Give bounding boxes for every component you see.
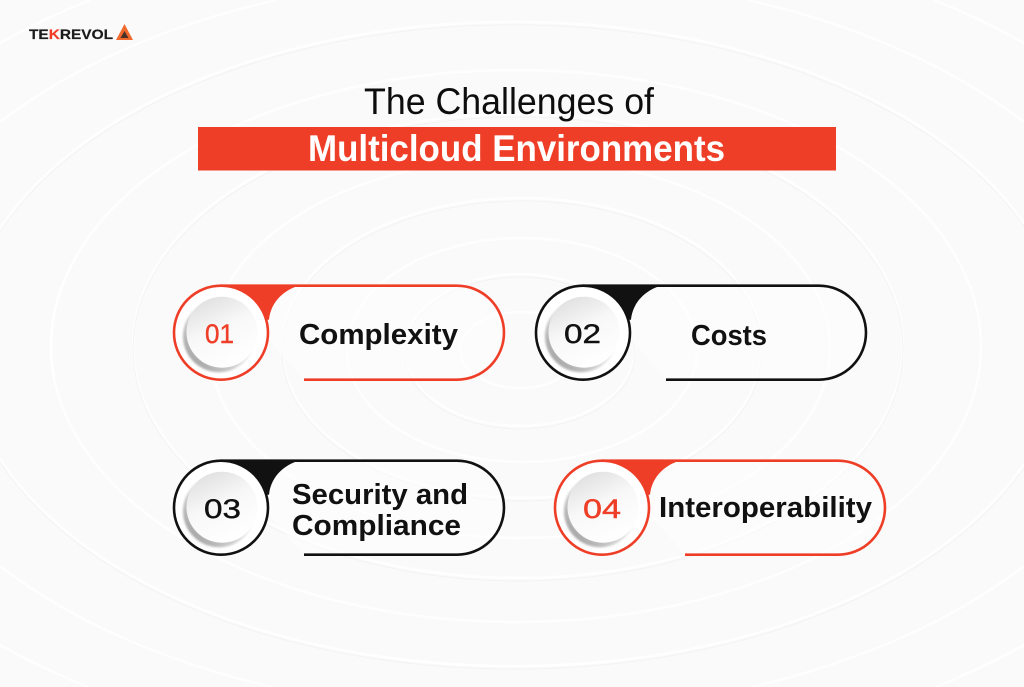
card 01: Complexity — [174, 285, 504, 380]
logo: Tekrevol — [29, 24, 133, 42]
title line one: The Challenges of — [364, 81, 655, 122]
title banner — [198, 127, 836, 170]
label: Security and Compliance — [292, 479, 468, 542]
label: Security and Compliance: Security and — [292, 479, 468, 511]
card 02: Costs — [536, 285, 866, 380]
number 03: 03 — [204, 494, 241, 524]
logo wordmark: TEKREVOL — [29, 27, 113, 42]
label: Complexity: Complexity — [299, 319, 458, 351]
label: Costs: Costs — [691, 320, 767, 352]
card 04: Interoperability — [555, 460, 885, 555]
number 04: 04 — [583, 494, 621, 524]
number 01: 01 — [205, 319, 234, 349]
label: Interoperability: Interoperability — [659, 492, 872, 524]
title line two: Multicloud Environments — [308, 128, 725, 169]
card 03: Security and Compliance — [174, 460, 504, 555]
label: Security and Compliance: Compliance — [292, 510, 461, 542]
number 02: 02 — [564, 319, 601, 349]
icon: logo triangle — [116, 24, 133, 40]
